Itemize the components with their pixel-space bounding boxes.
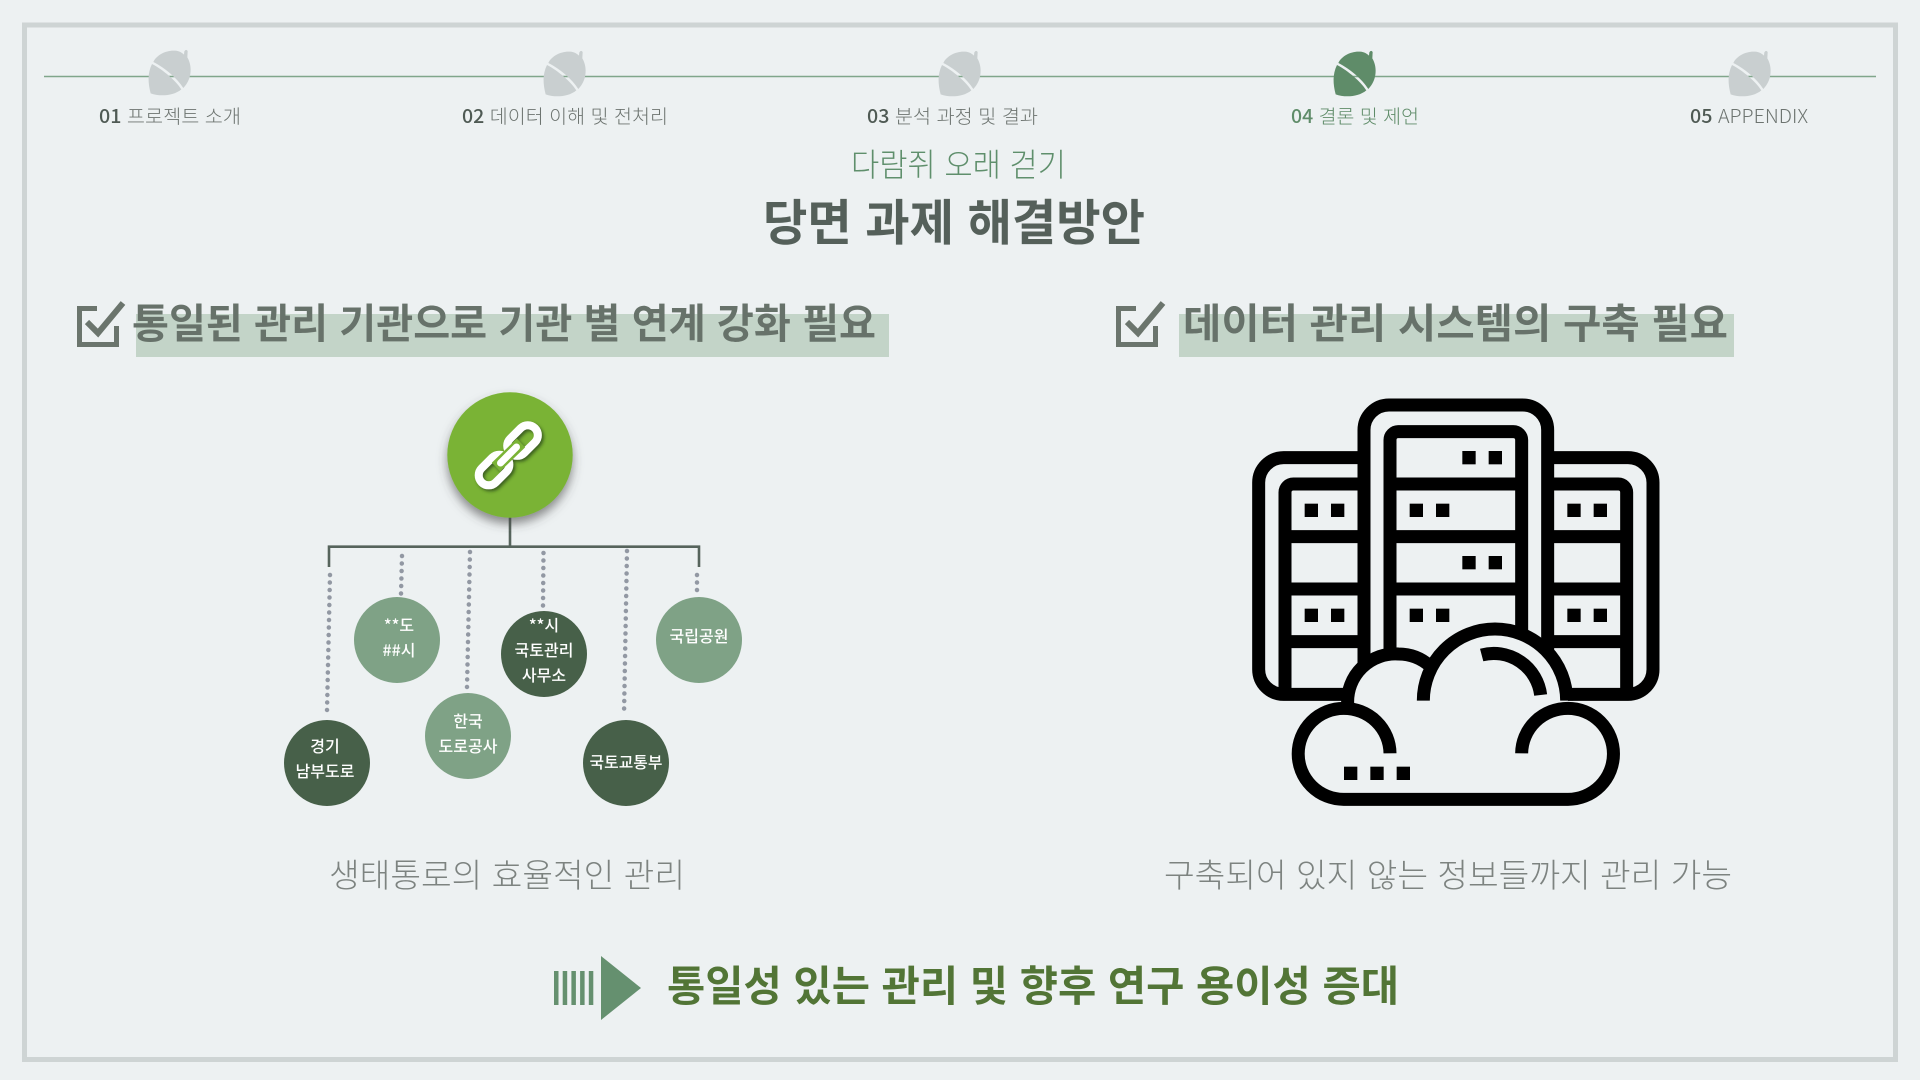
arrow icon — [554, 956, 641, 1020]
icon: acorn step 5 — [1729, 51, 1771, 96]
node: **시 국토관리 사무소: **시 — [529, 612, 559, 636]
icon: acorn step 1 — [149, 50, 191, 95]
connector lines — [329, 515, 699, 567]
subtitle: 다람쥐 오래 걷기 — [851, 140, 1066, 186]
node: 경기 남부도로: 경기 — [310, 733, 340, 757]
node: **시 국토관리 사무소 — [501, 611, 587, 697]
center server — [1364, 405, 1548, 677]
navigation timeline — [44, 50, 1876, 129]
heading text: 데이터 관리 시스템의 구축 필요 — [1183, 290, 1728, 350]
cloud — [1298, 629, 1613, 799]
icon: acorn step 4 active — [1334, 51, 1376, 96]
right server — [1554, 458, 1653, 694]
heading text: 통일된 관리 기관으로 기관 별 연계 강화 필요 — [132, 290, 876, 350]
icon: acorn step 3 — [939, 51, 981, 96]
nav label 3: 03 분석 과정 및 결과 — [867, 102, 1038, 129]
icon: checkbox — [1118, 303, 1163, 344]
node: 국토교통부 — [583, 720, 669, 806]
node: 한국 도로공사: 도로공사 — [439, 733, 498, 757]
node: 경기 남부도로: 남부도로 — [296, 758, 354, 782]
node: 국토교통부: 국토교통부 — [590, 749, 662, 773]
nav label 1: 01 프로젝트 소개 — [99, 102, 241, 129]
org diagram — [284, 392, 742, 806]
right caption: 구축되어 있지 않는 정보들까지 관리 가능 — [1164, 849, 1732, 897]
icon: cloud server — [1259, 405, 1653, 799]
dotted connectors — [327, 551, 697, 715]
node: 한국 도로공사 — [425, 693, 511, 779]
node: 국립공원 — [656, 597, 742, 683]
node: **도 ##시 — [354, 597, 440, 683]
left server — [1259, 458, 1358, 694]
node: 경기 남부도로 — [284, 720, 370, 806]
node: 한국 도로공사: 한국 — [453, 708, 483, 732]
panel: left heading — [80, 290, 889, 357]
nav label 4 active: 04 결론 및 제언 — [1291, 102, 1419, 129]
node: 국립공원: 국립공원 — [670, 623, 728, 647]
node: **시 국토관리 사무소: 국토관리 — [515, 637, 573, 661]
panel: right heading — [1118, 290, 1734, 357]
title: 당면 과제 해결방안 — [763, 184, 1145, 255]
icon: acorn step 2 — [544, 51, 586, 96]
icon: checkbox — [80, 303, 123, 344]
node: **도 ##시: ##시 — [383, 637, 415, 661]
node: **시 국토관리 사무소: 사무소 — [522, 662, 566, 686]
conclusion text: 통일성 있는 관리 및 향후 연구 용이성 증대 — [667, 953, 1399, 1014]
nav label 2: 02 데이터 이해 및 전처리 — [462, 102, 668, 129]
nav label 5: 05 APPENDIX — [1690, 102, 1808, 129]
left caption: 생태통로의 효율적인 관리 — [329, 849, 685, 897]
node: **도 ##시: **도 — [384, 612, 414, 636]
icon: green link circle — [447, 392, 573, 518]
